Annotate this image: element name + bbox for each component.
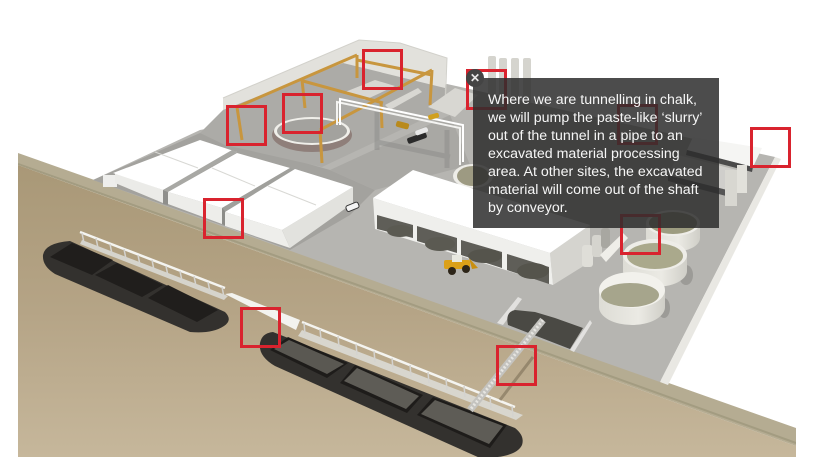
river bank	[18, 153, 796, 446]
wheel loader	[444, 255, 478, 275]
small silos and plant	[582, 228, 628, 267]
shed 1	[113, 140, 237, 203]
panel text: Where we are tunnelling in chalk,	[488, 92, 697, 108]
walkway between barges	[225, 293, 300, 330]
slurry pipe	[337, 99, 463, 165]
processing hall	[200, 40, 478, 167]
tank 3	[646, 210, 700, 252]
back silos	[488, 56, 531, 78]
spoil pit	[497, 297, 592, 352]
temporary storage sheds	[103, 140, 353, 248]
white car	[345, 202, 360, 212]
panel text: by conveyor.	[488, 200, 568, 216]
panel text: excavated material processing	[488, 146, 680, 162]
truss supports	[377, 112, 450, 168]
first barge	[43, 232, 229, 332]
storage containers	[345, 80, 478, 117]
panel text: material will come out of the shaft	[488, 182, 699, 198]
panel text	[488, 92, 703, 216]
settling tanks	[599, 210, 700, 325]
panel text: we will pump the paste-like ‘slurry’	[488, 110, 702, 126]
tank 2	[623, 239, 693, 287]
hotspot markers	[204, 50, 790, 384]
shed 2	[168, 153, 290, 224]
material tank behind panel	[453, 164, 493, 188]
shed 3	[225, 169, 353, 248]
barge railing	[298, 322, 523, 420]
circular tank	[272, 117, 352, 152]
material storage building	[373, 170, 590, 285]
conveyor	[470, 320, 543, 410]
site vehicles	[395, 113, 440, 144]
site ground	[93, 84, 781, 385]
right-hand buildings	[668, 137, 762, 206]
panel text: area. At other sites, the excavated	[488, 164, 703, 180]
close button: ✕	[470, 71, 480, 85]
second barge	[260, 322, 523, 458]
barge railing	[80, 232, 228, 300]
info panel	[473, 78, 719, 228]
orange frame	[237, 55, 432, 163]
panel text: out of the tunnel in a pipe to an	[488, 128, 683, 144]
tank 1	[599, 272, 670, 325]
close button	[466, 69, 484, 87]
bays with spoil piles	[377, 215, 549, 284]
river	[18, 165, 796, 457]
